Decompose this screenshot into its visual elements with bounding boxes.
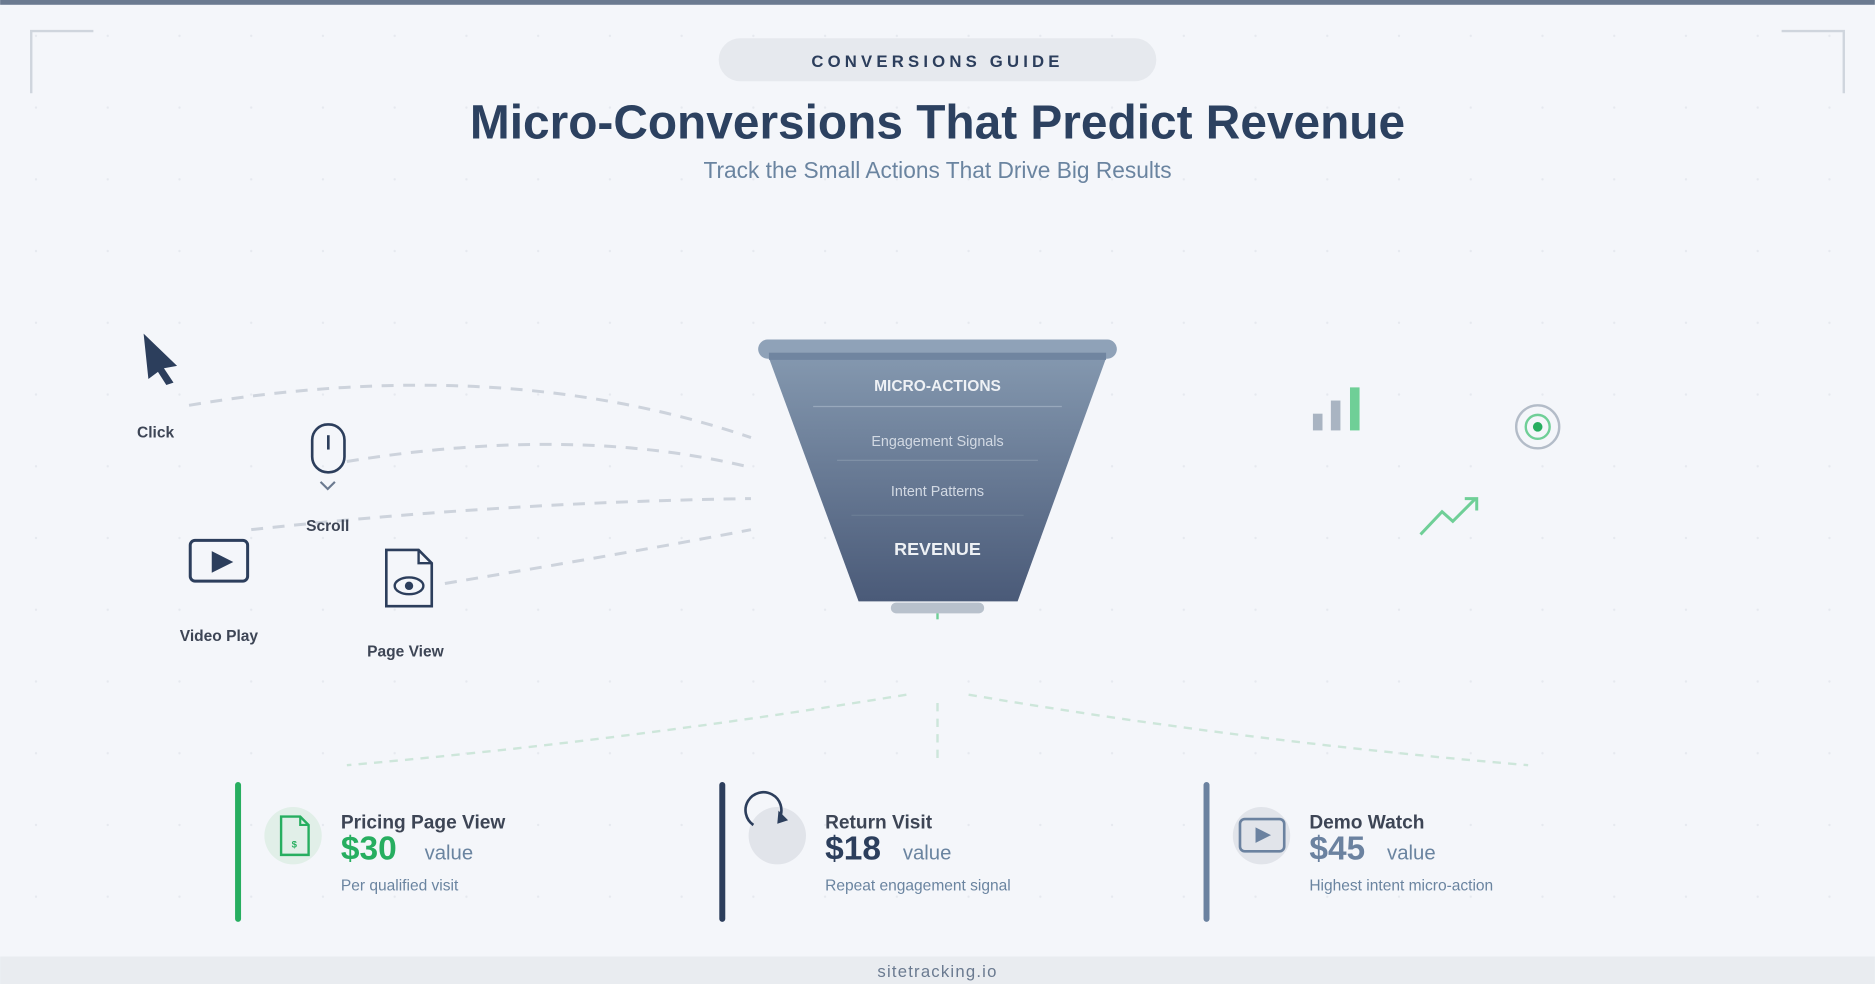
icon: page view [367,550,445,660]
icon: scroll: Scroll [306,518,349,535]
card: return visit: Return Visit [825,813,933,834]
funnel: Intent Patterns [891,484,984,500]
badge: conversions guide: CONVERSIONS GUIDE [811,52,1064,71]
funnel: REVENUE [894,539,981,559]
card: demo watch: $45 [1309,831,1365,868]
card: return visit: value [903,843,951,865]
card: pricing page view [235,782,505,922]
icon: target [1516,405,1559,448]
footer [0,957,1875,984]
subtitle: Track the Small Actions That Drive Big Results [703,157,1172,183]
footer: sitetracking.io [877,962,998,981]
dashed flow lines [189,385,751,583]
icon: click cursor [137,334,177,442]
icon: video play [180,540,258,645]
icon: bar chart [1313,387,1360,430]
card: pricing page view: Per qualified visit [341,878,459,895]
card: pricing page view: $ [292,840,298,851]
card: pricing page view: value [425,843,473,865]
card: demo watch: Highest intent micro-action [1309,878,1493,895]
card: pricing page view: Pricing Page View [341,813,505,834]
connector lines [347,695,1528,765]
card: demo watch: Demo Watch [1309,813,1424,834]
card: demo watch [1204,782,1493,922]
badge: conversions guide [719,38,1156,81]
card: pricing page view: $30 [341,831,397,868]
card: return visit: $18 [825,831,881,868]
funnel [758,340,1117,619]
icon: video play: Video Play [180,628,258,645]
icon: page view: Page View [367,643,445,660]
title: Micro-Conversions That Predict Revenue [470,97,1405,150]
funnel: MICRO-ACTIONS [874,378,1001,395]
icon: trend arrow [1421,499,1477,534]
card: return visit [719,782,1011,922]
card: demo watch: value [1387,843,1436,865]
icon: click cursor: Click [137,425,174,442]
icon: scroll [306,424,349,535]
card: return visit: Repeat engagement signal [825,878,1011,895]
funnel: Engagement Signals [871,434,1004,450]
